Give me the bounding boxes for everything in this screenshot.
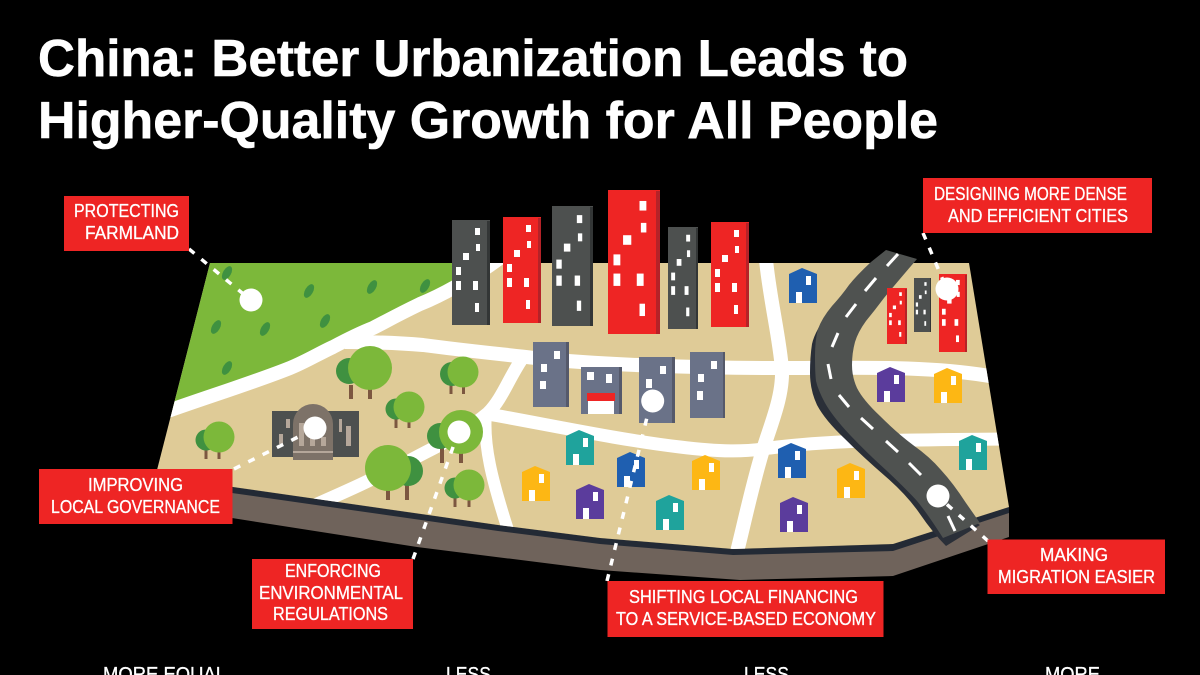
callout: migration bbox=[988, 540, 1165, 594]
marker dots bbox=[240, 278, 958, 508]
title: Higher-Quality Growth for All People bbox=[38, 92, 938, 150]
callout: improving governance: IMPROVING bbox=[88, 475, 183, 495]
trees bbox=[196, 346, 484, 507]
callout: improving governance bbox=[39, 469, 232, 524]
leader lines bbox=[189, 233, 988, 581]
tall buildings skyline bbox=[452, 190, 749, 334]
callout: local financing bbox=[608, 581, 884, 637]
title: China: Better Urbanization Leads to bbox=[38, 30, 908, 88]
white streets bbox=[165, 258, 1005, 552]
government building bbox=[272, 404, 359, 460]
slab top edge bbox=[157, 470, 1009, 555]
callout: designing cities: DESIGNING MORE DENSE bbox=[934, 184, 1127, 204]
callout: environmental regulations bbox=[252, 559, 413, 629]
title bbox=[38, 30, 938, 150]
callout: designing cities bbox=[923, 178, 1152, 233]
callout: local financing: SHIFTING LOCAL FINANCING bbox=[629, 587, 858, 607]
earth slab bbox=[157, 470, 1009, 580]
land surface bbox=[157, 263, 1009, 549]
callout: local financing: TO A SERVICE-BASED ECONOMY bbox=[616, 609, 876, 629]
callout: protecting farmland: PROTECTING bbox=[74, 201, 179, 221]
callout: migration: MIGRATION EASIER bbox=[998, 567, 1155, 587]
callout: environmental regulations: REGULATIONS bbox=[273, 604, 388, 624]
callout: migration: MAKING bbox=[1040, 545, 1108, 565]
farmland bbox=[172, 263, 452, 409]
callout: improving governance: LOCAL GOVERNANCE bbox=[51, 497, 220, 517]
houses bbox=[522, 268, 987, 532]
highway bbox=[810, 250, 980, 546]
callout: environmental regulations: ENVIRONMENTAL bbox=[259, 583, 403, 603]
small tower cluster bbox=[887, 274, 967, 352]
callout: designing cities: AND EFFICIENT CITIES bbox=[948, 206, 1128, 226]
callout: environmental regulations: ENFORCING bbox=[285, 561, 381, 581]
callout: protecting farmland: FARMLAND bbox=[85, 223, 179, 243]
callout: protecting farmland bbox=[64, 196, 189, 251]
bottom column headings bbox=[103, 664, 1100, 675]
central mid-rise buildings bbox=[533, 342, 725, 423]
city map illustration bbox=[157, 190, 1009, 581]
